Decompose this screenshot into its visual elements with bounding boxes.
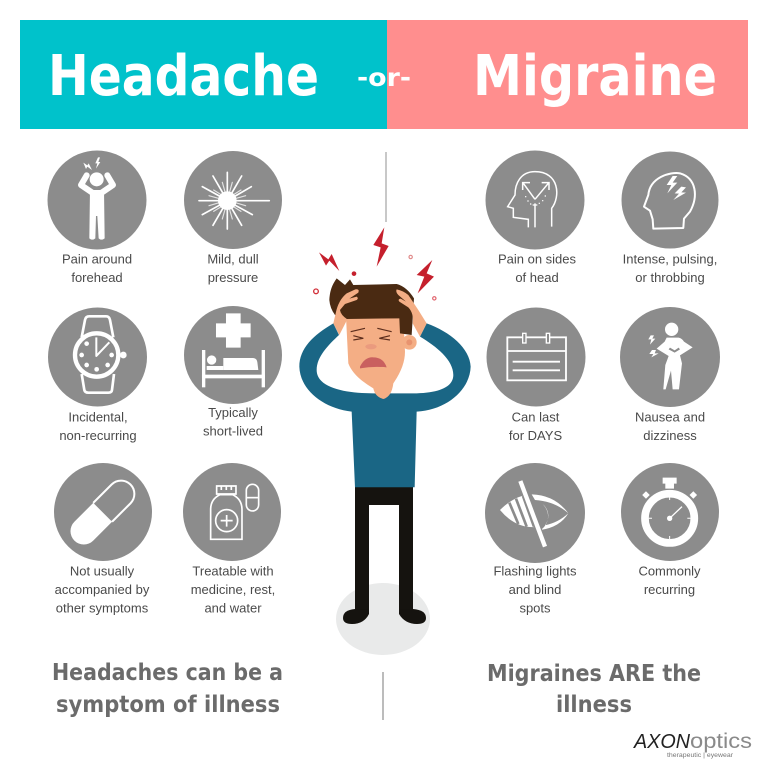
- icon: medicine bottle: [211, 484, 259, 539]
- label: Flashing lights: [493, 564, 577, 578]
- legs and feet: [343, 487, 426, 624]
- hair: [329, 278, 414, 335]
- label: Pain on sides: [498, 252, 577, 266]
- illustration: man with headache: [299, 227, 471, 655]
- label: Pain around: [62, 252, 132, 266]
- label: medicine, rest,: [191, 582, 275, 597]
- logo: Axon Optics: AXON: [633, 731, 691, 753]
- icon: crossed-out eye: [500, 481, 568, 547]
- item: intense pulsing: [622, 152, 718, 285]
- item: not usually accompanied: [54, 463, 152, 616]
- label: Commonly: [638, 564, 701, 578]
- item: nausea and dizziness: [620, 307, 720, 443]
- item: commonly recurring: [621, 463, 719, 597]
- item: flashing lights: [485, 463, 585, 616]
- label: Intense, pulsing,: [623, 252, 717, 266]
- hands: [333, 289, 359, 335]
- icon: stopwatch: [642, 478, 697, 543]
- label: other symptoms: [56, 600, 149, 616]
- heading: Headache: Headache: [48, 44, 319, 109]
- neck and face: [346, 317, 405, 399]
- label: recurring: [644, 582, 695, 597]
- label: or throbbing: [635, 270, 705, 285]
- icon: capsule pill: [65, 475, 140, 550]
- label: Treatable with: [192, 564, 274, 578]
- headache conclusion: Headaches can be a: [52, 660, 283, 686]
- label: accompanied by: [55, 582, 150, 597]
- label: spots: [519, 600, 551, 616]
- lightning bolts: [319, 227, 434, 293]
- item: typically short-lived: [184, 306, 282, 438]
- headache conclusion: symptom of illness: [56, 692, 280, 718]
- migraine conclusion: illness: [556, 692, 632, 718]
- logo: Axon Optics: therapeutic | eyewear: [667, 752, 734, 759]
- icon: radiating burst: [199, 172, 269, 229]
- upper body and head: [299, 227, 471, 487]
- label: Mild, dull: [207, 252, 259, 266]
- item: pain around forehead: [48, 150, 146, 285]
- label: Not usually: [70, 564, 135, 578]
- label: forehead: [71, 270, 123, 285]
- icon: head with diverging arrows: [508, 172, 557, 227]
- shirt and arms: [299, 323, 471, 487]
- label: of head: [515, 270, 559, 285]
- migraine conclusion: [487, 661, 701, 718]
- heading: or: -or-: [357, 63, 411, 92]
- migraine conclusion: Migraines ARE the: [487, 661, 701, 687]
- logo: Axon Optics: optics: [690, 730, 752, 753]
- label: pressure: [208, 270, 258, 285]
- icon: calendar: [507, 333, 566, 380]
- label: Incidental,: [68, 410, 128, 424]
- floor shadow: [336, 583, 430, 655]
- heading: Migraine: Migraine: [473, 44, 717, 109]
- item: incidental non-recurring: [48, 308, 147, 443]
- pain sparks: [314, 255, 436, 300]
- item: pain on sides of head: [486, 150, 584, 285]
- mouth: [360, 357, 387, 368]
- icon: hospital bed and cross: [202, 313, 265, 387]
- panel: migraine symptoms: [485, 150, 720, 616]
- nose: [365, 344, 377, 349]
- header banner: [20, 20, 748, 129]
- label: short-lived: [203, 424, 263, 438]
- label: non-recurring: [59, 428, 137, 443]
- ear: [402, 335, 417, 350]
- icon: person holding head: [81, 157, 113, 240]
- item: mild dull pressure: [184, 151, 282, 285]
- item: can last for days: [486, 308, 586, 443]
- icon: person holding stomach: [648, 323, 693, 389]
- label: Typically: [208, 405, 258, 420]
- icon: wristwatch: [75, 316, 127, 393]
- logo: Axon Optics: [633, 730, 752, 759]
- eyes and brows: [351, 328, 392, 340]
- item: treatable: [183, 463, 281, 616]
- label: for DAYS: [509, 428, 562, 443]
- label: and water: [204, 600, 262, 616]
- label: and blind: [509, 582, 561, 597]
- icon: head with lightning: [644, 173, 695, 229]
- headache conclusion: [52, 660, 283, 718]
- label: Can last: [512, 410, 560, 424]
- label: dizziness: [643, 428, 697, 443]
- label: Nausea and: [635, 410, 705, 424]
- panel: headache symptoms: [48, 150, 282, 616]
